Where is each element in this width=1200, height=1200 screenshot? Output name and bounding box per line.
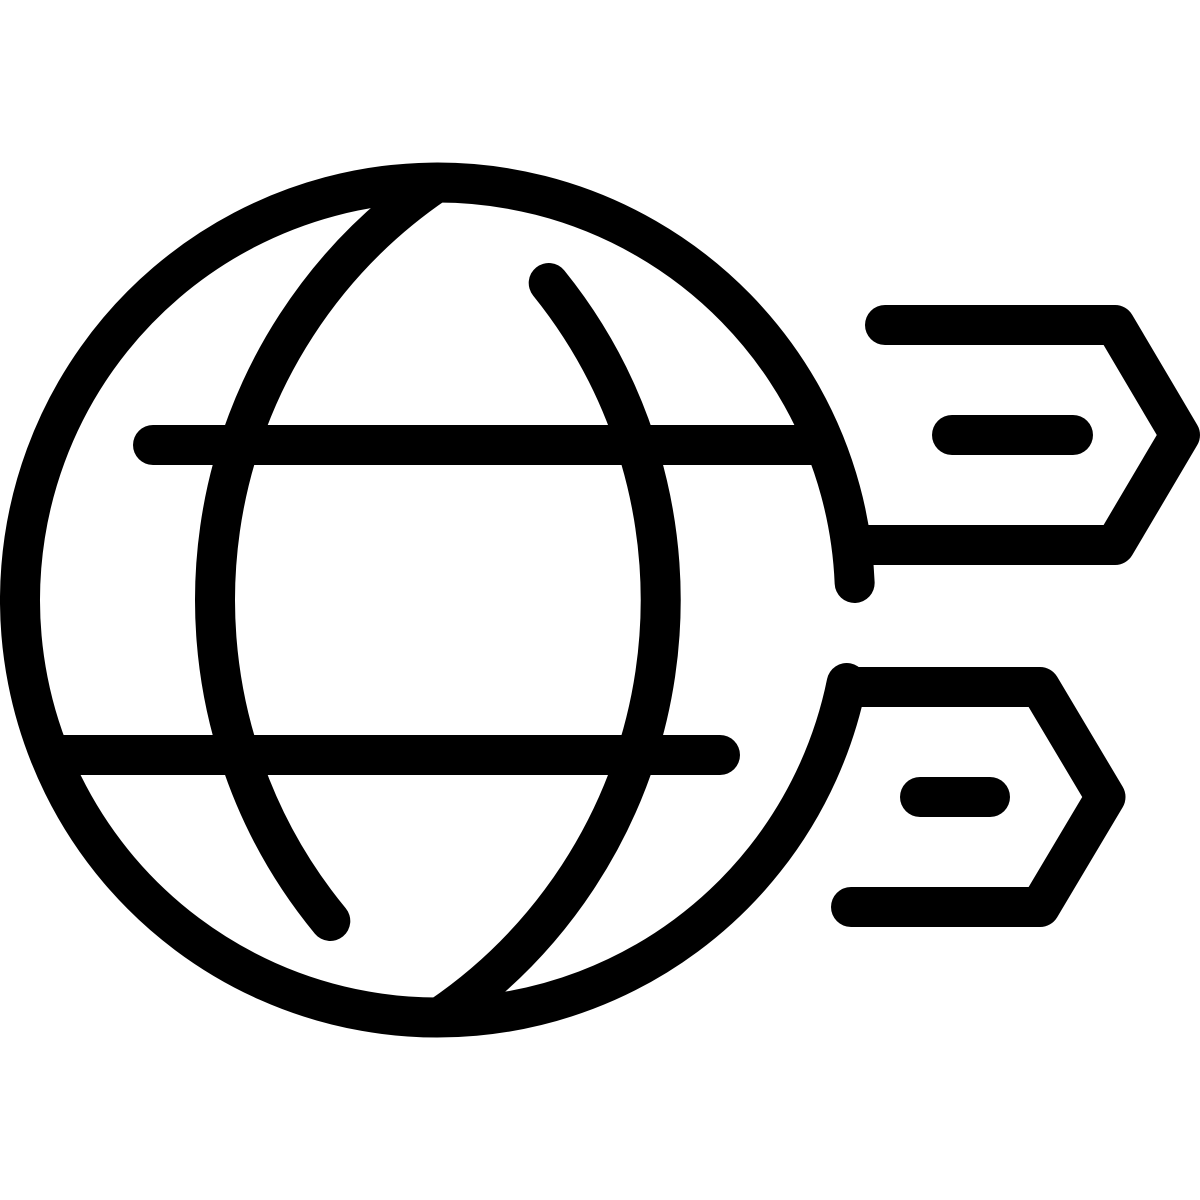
lower tag dash <box>920 777 990 817</box>
left meridian <box>215 183 436 921</box>
lower arrow tag <box>846 687 1106 907</box>
globe outline <box>20 183 855 1018</box>
lower latitude line <box>50 735 720 775</box>
upper arrow tag <box>855 325 1180 545</box>
right meridian <box>440 283 661 1017</box>
upper latitude line <box>153 425 825 465</box>
upper tag dash <box>952 415 1073 455</box>
